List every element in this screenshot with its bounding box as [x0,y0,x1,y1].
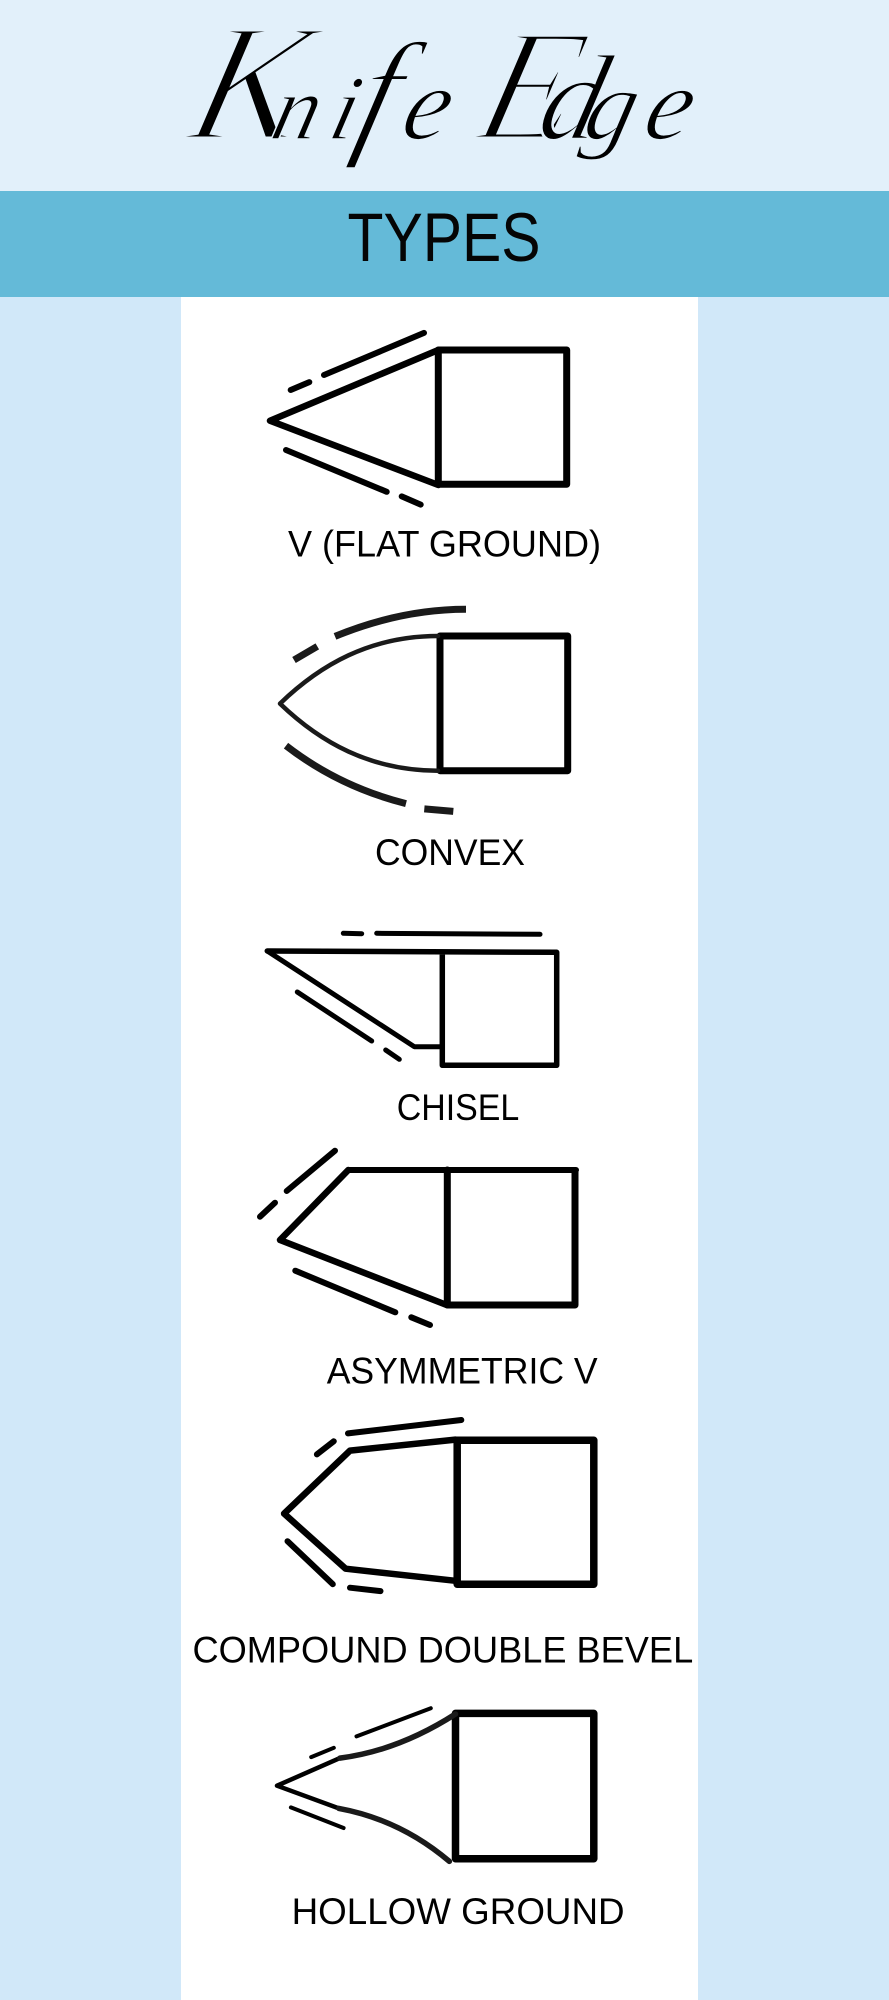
label: asymmetric V: ASYMMETRIC V [327,1349,598,1391]
panel: subtitle band [0,191,889,297]
subtitle: TYPES: TYPES [348,199,540,276]
label: convex: CONVEX [375,831,525,873]
title: e [634,46,709,162]
title: n [263,58,334,160]
diagram: hollow ground edge [277,1708,594,1861]
panel: title band [0,0,889,191]
title: e [392,46,467,162]
title: E [459,0,603,174]
label: compound double bevel: COMPOUND DOUBLE BEVEL [192,1628,693,1670]
panel: white centre column [181,297,698,2000]
diagram: asymmetric V edge [260,1151,576,1325]
diagram: convex edge [280,609,568,811]
title: g [575,50,652,161]
label: V flat ground: V (FLAT GROUND) [288,522,601,564]
diagram: compound double bevel edge [284,1420,594,1591]
title: i [321,58,372,160]
title: f [342,14,436,170]
label: hollow ground: HOLLOW GROUND [292,1890,625,1932]
diagram: V flat ground edge [270,333,567,505]
title [171,0,722,175]
label: chisel: CHISEL [397,1086,519,1128]
diagram: chisel edge [267,933,557,1065]
title: d [527,31,623,166]
